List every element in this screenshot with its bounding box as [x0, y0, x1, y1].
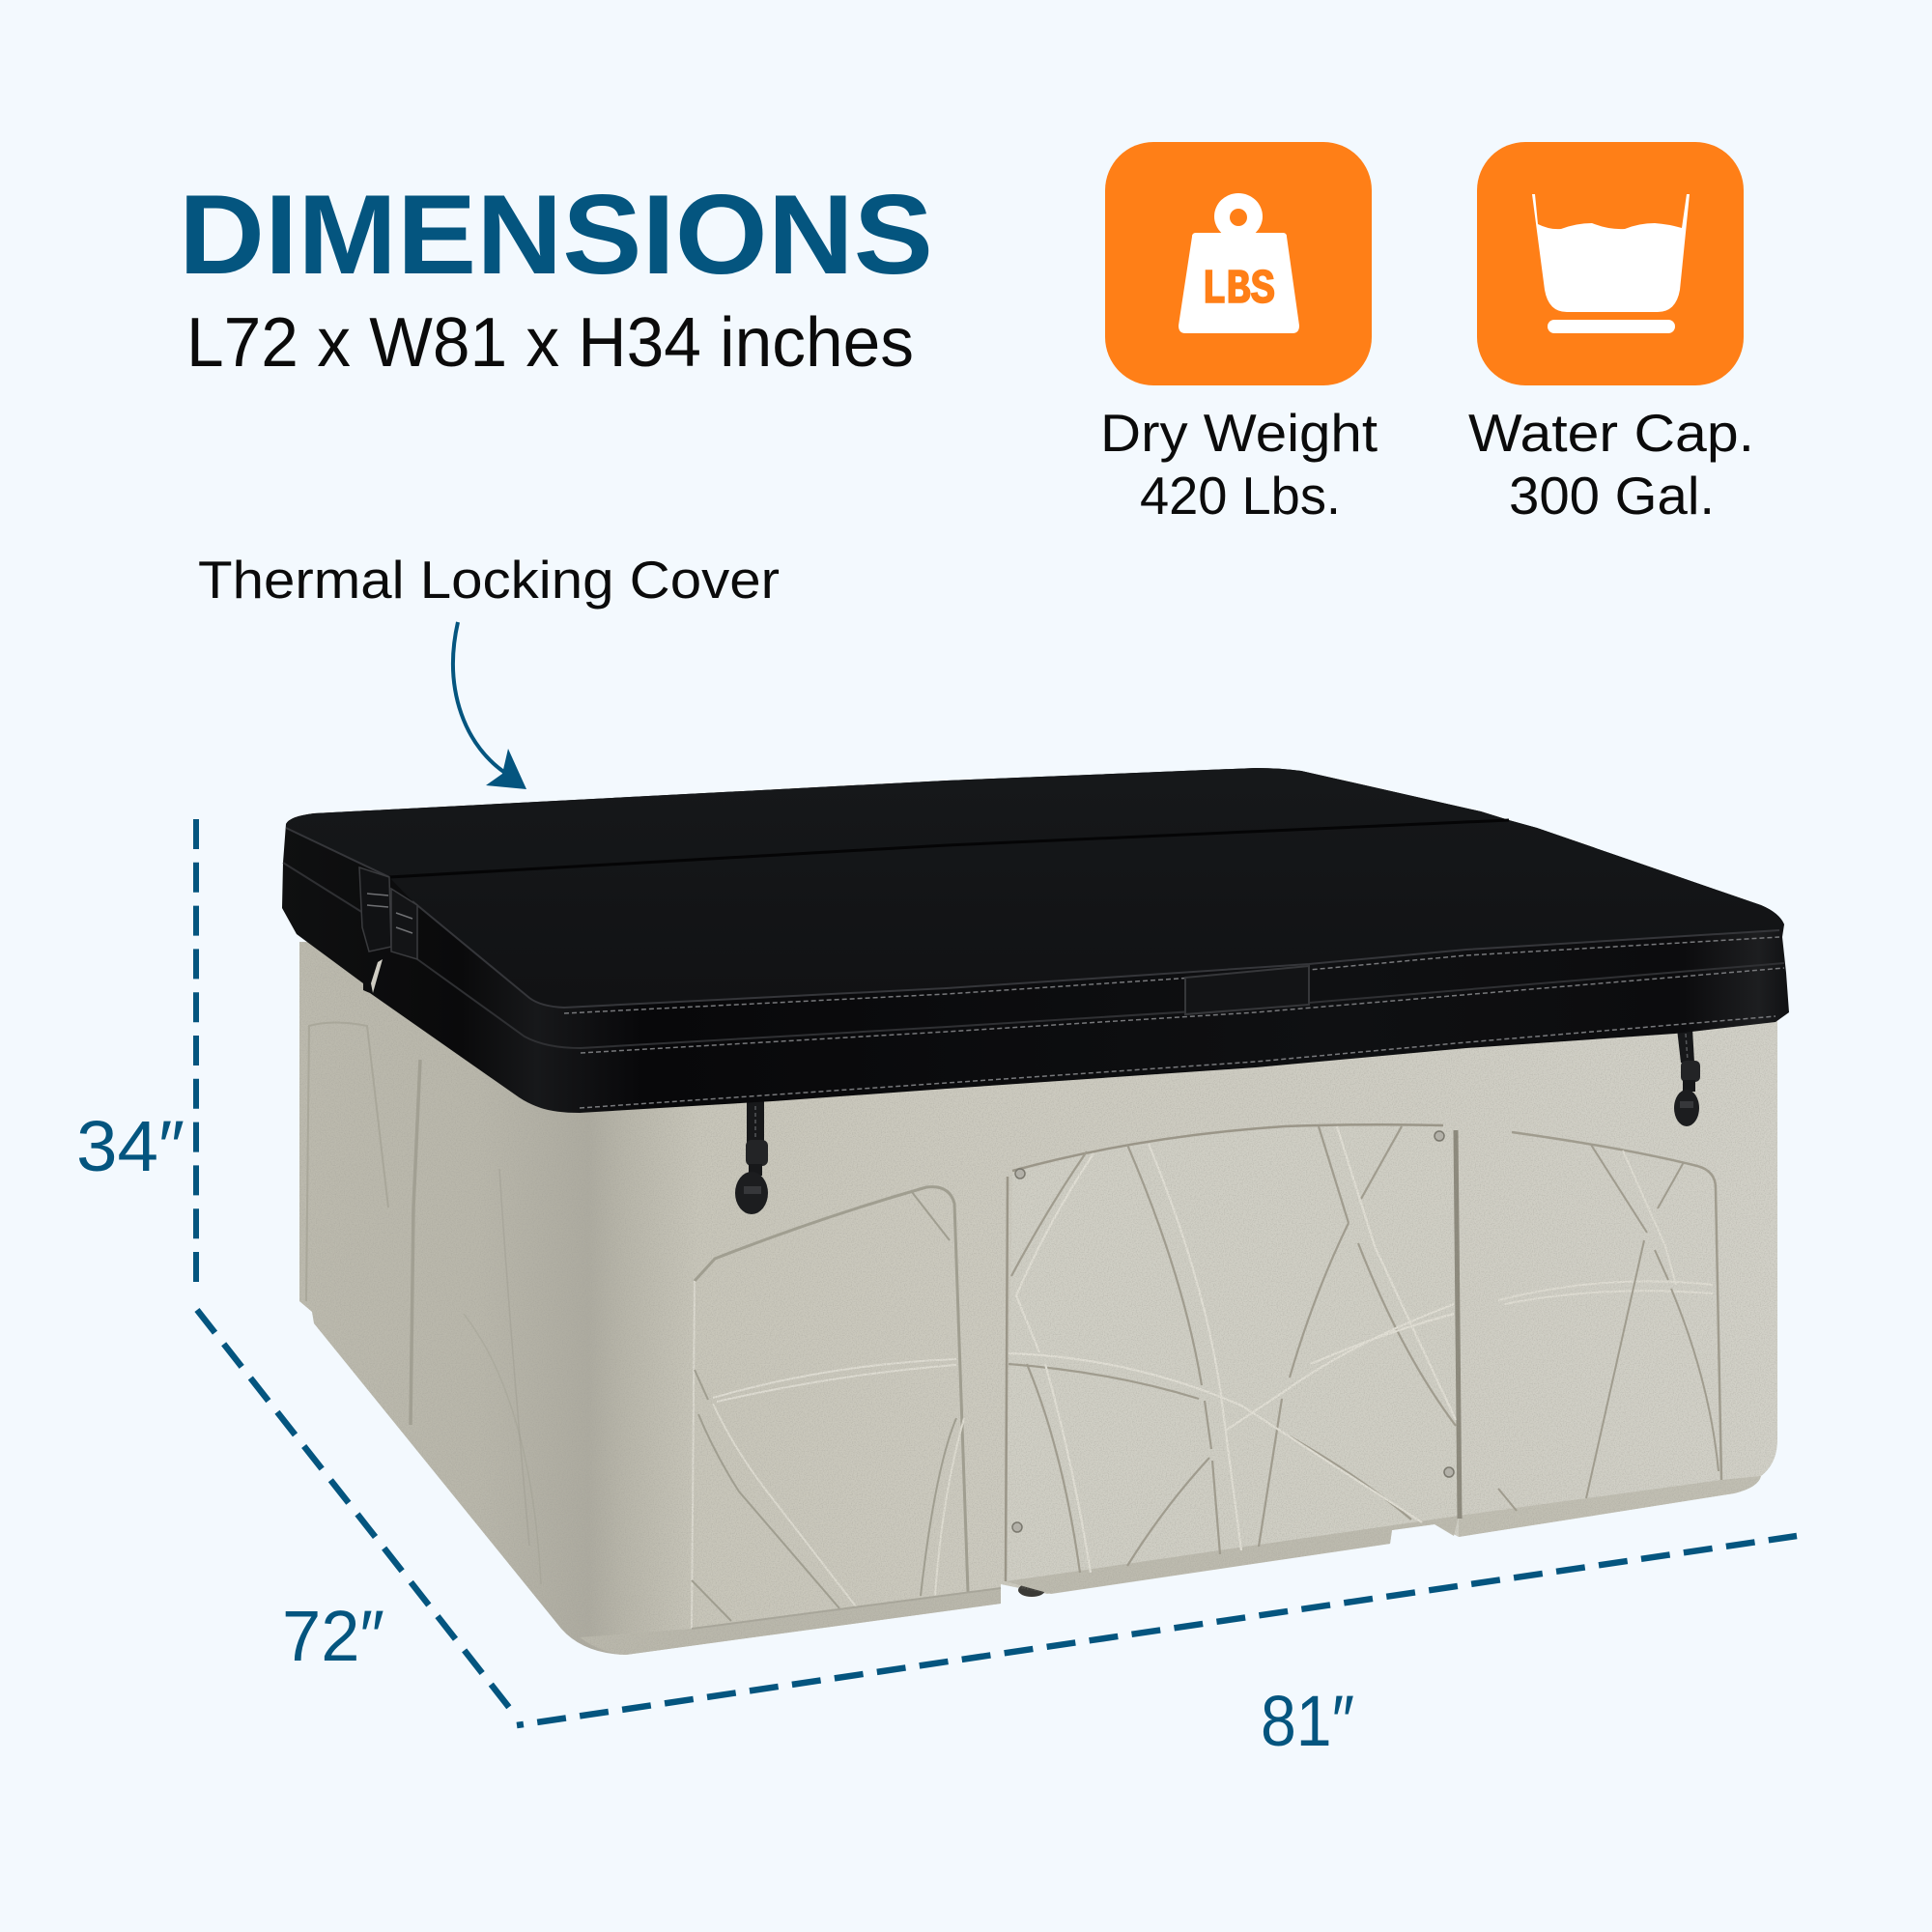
wheel: [1018, 1583, 1045, 1597]
title: DIMENSIONS: [179, 171, 933, 298]
callout: thermal locking cover: Thermal Locking Cover: [198, 550, 780, 610]
left front panel relief: [692, 1187, 1001, 1629]
right front panel relief: [1498, 1132, 1721, 1511]
latch strap right: [1674, 1029, 1700, 1126]
dimension line: length: [197, 1310, 511, 1710]
cover handle: [1185, 966, 1309, 1014]
icon: water capacity: [1477, 142, 1744, 385]
tub body: [299, 942, 1777, 1655]
infographic canvas: [79, 142, 1797, 1747]
cover seam and stitching: [283, 820, 1784, 1108]
door relief lines: [1009, 1126, 1456, 1573]
arrow: callout to cover: [453, 622, 526, 789]
cover side band: [282, 768, 1789, 1113]
center door panel: [1006, 1124, 1460, 1581]
label: dry weight: Dry Weight: [1100, 403, 1378, 463]
cover top surface: [286, 768, 1784, 1008]
latch strap left: [735, 1101, 768, 1214]
icon: dry weight: [1105, 142, 1372, 385]
door screws: [1012, 1131, 1454, 1532]
label: water capacity: Water Cap.: [1468, 403, 1754, 463]
thermal cover: [282, 768, 1789, 1113]
label: length: 72″: [282, 1596, 384, 1676]
hot tub product: [282, 768, 1789, 1671]
lower plinth: [1006, 1516, 1459, 1594]
label: dry weight: [1100, 403, 1378, 526]
label: width: 81″: [1261, 1681, 1354, 1761]
label: dry weight: 420 Lbs.: [1140, 466, 1341, 526]
icon: dry weight: LBS: [1202, 263, 1275, 318]
speckle texture: [290, 918, 1787, 1671]
subtitle: overall dimensions: L72 x W81 x H34 inches: [186, 304, 914, 382]
hinge strap: [359, 867, 417, 993]
dimension line: height: [193, 819, 199, 1282]
side panel relief: [306, 1022, 541, 1584]
dimension line: width: [517, 1536, 1797, 1725]
label: water capacity: 300 Gal.: [1509, 466, 1715, 526]
label: height: 34″: [76, 1106, 185, 1186]
label: water capacity: [1468, 403, 1754, 526]
